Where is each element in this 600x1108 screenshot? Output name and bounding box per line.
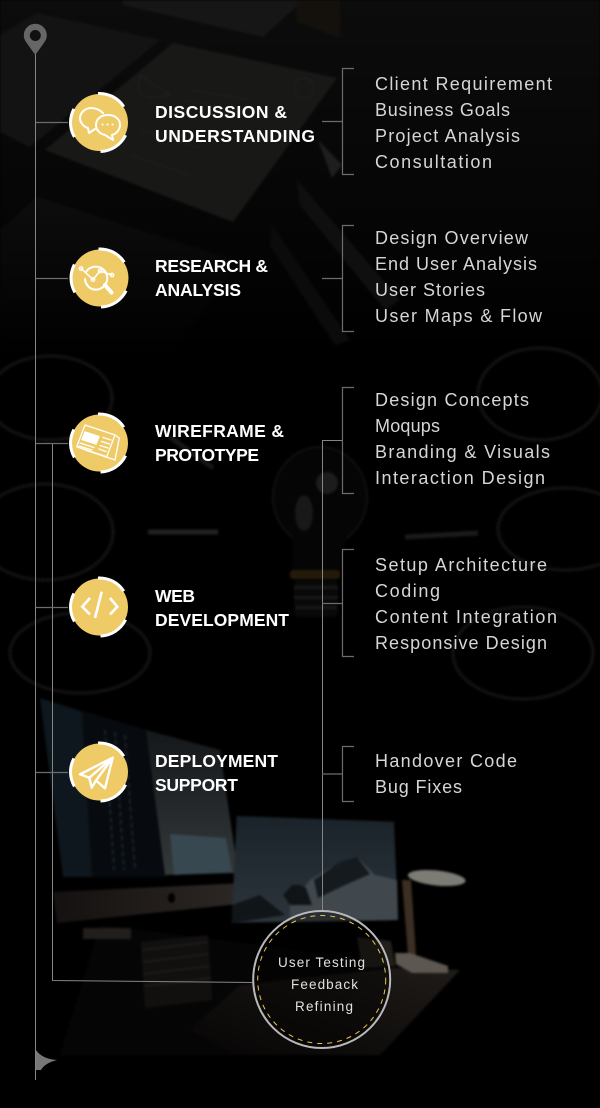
icon: wireframe sheets — [77, 425, 119, 460]
step 3 list: Design Concepts — [375, 390, 529, 410]
step 2 list: Design Overview — [375, 228, 529, 248]
step 3 heading — [155, 421, 284, 465]
background: light bulb — [273, 447, 367, 617]
feedback loop line left — [36, 444, 254, 982]
background: sketch papers — [0, 0, 600, 360]
icon: magnifier with chart — [79, 267, 114, 292]
step 3: wireframe and prototype — [36, 414, 128, 472]
feedback circle: User Testing — [278, 955, 365, 970]
feedback loop line right — [322, 440, 342, 912]
background: scribbled circles — [0, 348, 600, 699]
step 1 list: Project Analysis — [375, 126, 520, 146]
step 3 heading: PROTOTYPE — [155, 445, 259, 465]
step 2 heading: ANALYSIS — [155, 280, 241, 300]
step 2 heading — [155, 256, 268, 300]
step 4 heading — [155, 586, 289, 630]
step 4 list — [375, 555, 557, 653]
step 1 heading: DISCUSSION & — [155, 102, 287, 122]
bracket: deployment — [322, 746, 354, 802]
icon: finish flag — [36, 1050, 57, 1070]
step 3 heading: WIREFRAME & — [155, 421, 284, 441]
step 4 heading: WEB — [155, 586, 195, 606]
step 5 list: Bug Fixes — [375, 777, 462, 797]
icon: speech bubbles — [80, 108, 120, 140]
step 4 list: Coding — [375, 581, 440, 601]
step 2 list: User Stories — [375, 280, 485, 300]
bracket: wireframe — [342, 388, 354, 494]
step 4 list: Setup Architecture — [375, 555, 547, 575]
bracket: web development — [322, 550, 354, 656]
background: paper sketch marks — [130, 75, 314, 175]
step 4 list: Responsive Design — [375, 633, 547, 653]
step 1 list: Business Goals — [375, 100, 510, 120]
timeline vertical line — [34, 52, 36, 1080]
icon: location pin — [24, 24, 47, 55]
step 2 list — [375, 228, 543, 326]
icon: paper plane — [80, 758, 113, 788]
step 2 heading: RESEARCH & — [155, 256, 268, 276]
step 1 list: Client Requirement — [375, 74, 552, 94]
step 2: research and analysis — [36, 249, 128, 307]
feedback circle — [253, 911, 390, 1048]
icon: code brackets — [82, 592, 117, 618]
bracket: discussion — [322, 68, 354, 174]
step 1: discussion and understanding — [36, 93, 128, 152]
step 3 list: Moqups — [375, 416, 440, 436]
step 3 list: Branding & Visuals — [375, 442, 550, 462]
step 5: deployment support — [36, 743, 128, 801]
step 5 heading: SUPPORT — [155, 775, 238, 795]
feedback circle: Feedback — [291, 977, 358, 992]
step 1 list — [375, 74, 552, 172]
background: desk with computers — [40, 698, 466, 1055]
step 3 list — [375, 390, 550, 488]
step 2 list: End User Analysis — [375, 254, 537, 274]
step 4: web development — [36, 578, 128, 636]
step 5 list — [375, 751, 517, 797]
background: scribbled dashes — [148, 437, 478, 537]
step 4 list: Content Integration — [375, 607, 557, 627]
step 1 list: Consultation — [375, 152, 492, 172]
step 1 heading — [155, 102, 315, 146]
step 5 heading — [155, 751, 278, 795]
step 5 list: Handover Code — [375, 751, 517, 771]
feedback circle: Refining — [295, 999, 353, 1014]
bracket: research — [322, 226, 354, 332]
step 2 list: User Maps & Flow — [375, 306, 543, 326]
step 3 list: Interaction Design — [375, 468, 545, 488]
step 4 heading: DEVELOPMENT — [155, 610, 289, 630]
step 1 heading: UNDERSTANDING — [155, 126, 315, 146]
step 5 heading: DEPLOYMENT — [155, 751, 278, 771]
